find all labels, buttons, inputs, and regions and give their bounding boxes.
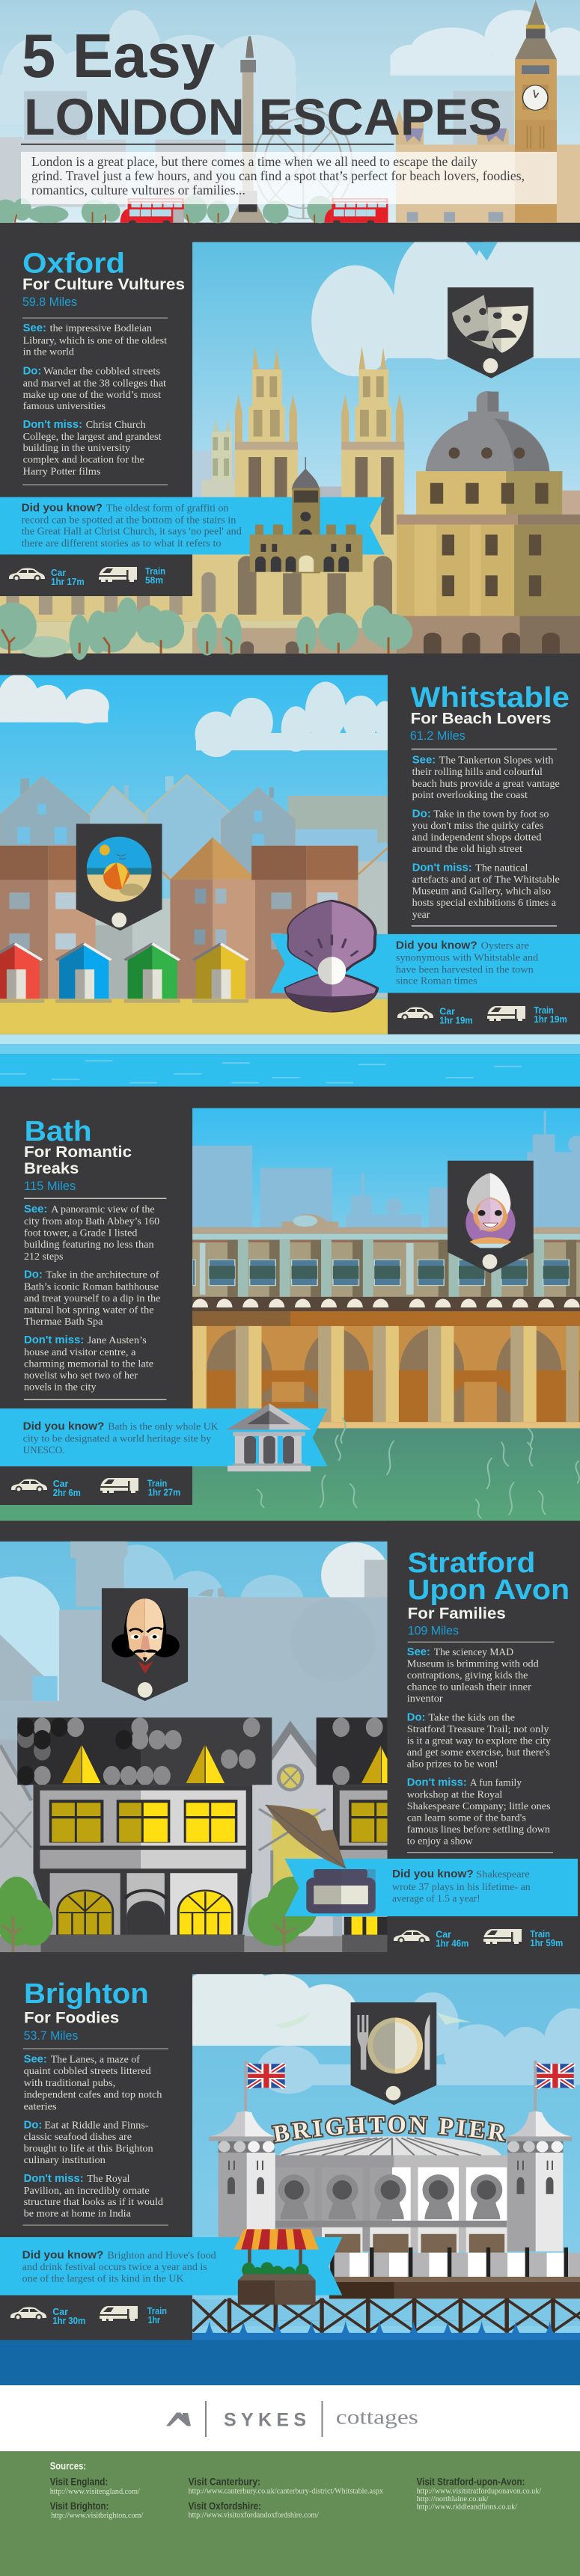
Oxford see / do / don't miss: Wander the cobbled streets xyxy=(43,366,160,377)
icon: Christ Church Tom Tower xyxy=(250,457,362,573)
Stratford see / do / don't miss: A fun family xyxy=(470,1778,522,1789)
Brighton see / do / don't miss: Pavilion, an incredibly ornate xyxy=(24,2186,150,2197)
icon: Sykes house mark xyxy=(166,2413,191,2426)
icon: quill and inkpot xyxy=(266,1805,376,1913)
Oxford did you know ribbon: the Great Hall at Christ Church, it says 'no peel' and xyxy=(22,527,242,538)
pier structure xyxy=(209,2061,572,2254)
Oxford see / do / don't miss: famous universities xyxy=(23,401,106,412)
sources column 3: http://northlaine.co.uk/ xyxy=(417,2495,489,2503)
Stratford did you know ribbon: average of 1.5 a year! xyxy=(392,1893,480,1904)
travel times: Stratford: 1hr 59m xyxy=(530,1937,563,1948)
Brighton did you know ribbon xyxy=(0,2237,342,2296)
Whitstable see / do / don't miss: See: xyxy=(412,753,436,766)
Stratford heading xyxy=(408,1548,570,1637)
sources column 3 xyxy=(417,2477,541,2512)
Whitstable see / do / don't miss: hosts special exhibitions 6 times a xyxy=(412,898,557,909)
Oxford heading: For Culture Vultures xyxy=(22,276,185,293)
travel times: Whitstable: Train xyxy=(534,1005,554,1016)
Stratford see / do / don't miss: workshop at the Royal xyxy=(407,1790,502,1801)
travel times: Whitstable: Car xyxy=(439,1005,455,1017)
Stratford heading: For Families xyxy=(408,1605,506,1622)
intro text: romantics, culture vultures or families... xyxy=(31,183,245,197)
Bath did you know ribbon: Bath is the only whole UK xyxy=(108,1421,219,1432)
Brighton heading: 53.7 Miles xyxy=(24,2028,78,2043)
Bath text panel xyxy=(0,1108,192,1505)
travel times: Whitstable: 1hr 19m xyxy=(534,1013,567,1025)
sources column 3: Visit Stratford-upon-Avon: xyxy=(417,2477,525,2488)
Bath did you know ribbon: Did you know? xyxy=(23,1420,104,1432)
sources column 2 xyxy=(189,2477,384,2520)
Brighton illustration xyxy=(0,1966,580,2420)
Whitstable see / do / don't miss xyxy=(412,753,560,921)
travel times: Oxford: 1hr 17m xyxy=(51,576,85,587)
Whitstable heading: Whitstable xyxy=(411,682,570,714)
Stratford see / do / don't miss: and get some exercise, but there's xyxy=(407,1747,550,1758)
Radcliffe Camera xyxy=(397,391,580,654)
icon: market stall xyxy=(233,2229,319,2304)
Stratford see / do / don't miss: to enjoy a show xyxy=(407,1836,474,1847)
icon: theatre masks badge xyxy=(448,287,534,378)
travel times: Brighton: Car xyxy=(52,2306,68,2317)
Bath did you know ribbon xyxy=(0,1408,328,1466)
intro text: London is a great place, but there comes a time when we all need to escape the daily xyxy=(31,154,477,169)
panel: Brighton xyxy=(0,1974,580,2385)
sources column 2: Visit Oxfordshire: xyxy=(189,2500,261,2512)
Bath see / do / don't miss: building featuring no less than xyxy=(24,1239,154,1251)
Whitstable see / do / don't miss: Don't miss: xyxy=(412,862,472,874)
panel: sources xyxy=(0,2451,580,2576)
Whitstable heading: For Beach Lovers xyxy=(411,711,551,727)
Whitstable did you know ribbon: synonymous with Whitstable and xyxy=(396,953,538,964)
Bath heading xyxy=(24,1116,132,1193)
Brighton did you know ribbon: Did you know? xyxy=(22,2248,103,2261)
Stratford see / do / don't miss: Take the kids on the xyxy=(428,1712,515,1723)
travel times: Brighton: 1hr 30m xyxy=(52,2315,85,2326)
Whitstable see / do / don't miss: their rolling hills and colourful xyxy=(412,767,543,778)
Oxford see / do / don't miss: and marvel at the 38 colleges that xyxy=(23,378,166,389)
Oxford see / do / don't miss: See: xyxy=(23,322,46,334)
travel times: Stratford xyxy=(394,1928,563,1949)
Bath did you know ribbon: UNESCO. xyxy=(23,1445,65,1456)
travel times: Oxford: 58m xyxy=(145,574,163,586)
Stratford see / do / don't miss: contraptions, giving kids the xyxy=(407,1670,528,1681)
title xyxy=(22,21,502,146)
Bath heading: Breaks xyxy=(24,1160,79,1177)
Oxford did you know ribbon xyxy=(0,497,385,554)
Bath heading: For Romantic xyxy=(24,1144,132,1161)
Stratford see / do / don't miss: Shakespeare Company; little ones xyxy=(407,1801,551,1812)
sea xyxy=(0,1034,580,1044)
sources column 1 xyxy=(50,2477,143,2520)
Stratford see / do / don't miss: chance to unleash their inner xyxy=(407,1682,531,1693)
Brighton see / do / don't miss: with traditional pubs, xyxy=(24,2078,115,2089)
Brighton see / do / don't miss: See: xyxy=(24,2052,47,2066)
sources column 1: http://www.visitengland.com/ xyxy=(50,2488,140,2496)
Union flags xyxy=(248,2064,574,2088)
Oxford see / do / don't miss: in the world xyxy=(23,346,74,358)
intro text xyxy=(31,154,525,197)
panel: header xyxy=(0,0,580,225)
Bath see / do / don't miss: foot tower, a Grade I listed xyxy=(24,1227,137,1239)
Stratford heading: Stratford xyxy=(408,1548,535,1579)
Oxford see / do / don't miss xyxy=(23,322,167,477)
Bath see / do / don't miss: city from atop Bath Abbey’s 160 xyxy=(24,1216,159,1227)
travel times: Brighton xyxy=(10,2305,167,2326)
Stratford see / do / don't miss: is it a great way to explore the city xyxy=(407,1735,551,1747)
travel times: Stratford: Car xyxy=(436,1928,451,1940)
Brighton see / do / don't miss: classic seafood dishes are xyxy=(24,2132,132,2143)
Stratford did you know ribbon: Did you know? xyxy=(392,1868,474,1880)
Brighton heading: Brighton xyxy=(24,1978,149,2010)
Tudor building xyxy=(0,1717,343,1952)
Oxford did you know ribbon: Did you know? xyxy=(22,501,103,515)
travel times: Bath: 1hr 27m xyxy=(148,1487,180,1497)
Oxford see / do / don't miss: building in the university xyxy=(23,443,130,454)
Oxford see / do / don't miss: the impressive Bodleian xyxy=(50,323,152,334)
beach huts xyxy=(0,944,248,1003)
icon: Shakespeare badge xyxy=(102,1588,188,1701)
Stratford heading: Upon Avon xyxy=(408,1574,570,1606)
Whitstable see / do / don't miss: point overlooking the coast xyxy=(412,790,528,801)
Stratford see / do / don't miss: Do: xyxy=(407,1711,425,1723)
icon: spa woman badge xyxy=(448,1161,534,1273)
Whitstable see / do / don't miss: you don't miss the quirky cafes xyxy=(412,821,543,832)
turrets xyxy=(219,2153,247,2237)
Brighton did you know ribbon: and drink festival occurs twice a year and is xyxy=(22,2262,207,2273)
Bath heading: 115 Miles xyxy=(24,1179,76,1193)
travel times: Bath: Train xyxy=(147,1478,167,1488)
Oxford did you know ribbon: record can be spotted at the bottom of the stairs in xyxy=(22,515,236,526)
Bath see / do / don't miss: Take in the architecture of xyxy=(46,1270,159,1281)
Brighton text panel xyxy=(0,1974,192,2340)
sources column 2: Visit Canterbury: xyxy=(189,2477,260,2488)
Oxford did you know ribbon: The oldest form of graffiti on xyxy=(106,503,229,515)
Brighton see / do / don't miss: culinary institution xyxy=(24,2155,106,2166)
Whitstable see / do / don't miss: The nautical xyxy=(475,863,528,874)
Whitstable see / do / don't miss: Take in the town by foot so xyxy=(433,809,549,820)
Bath see / do / don't miss: charming memorial to the late xyxy=(24,1359,153,1370)
travel times: Stratford: Train xyxy=(530,1928,550,1939)
sources column 3: http://www.riddleandfinns.co.uk/ xyxy=(417,2503,517,2512)
travel times: Stratford: 1hr 46m xyxy=(436,1937,468,1949)
panel: Whitstable xyxy=(0,674,580,1081)
Stratford see / do / don't miss: also prizes to be won! xyxy=(407,1759,498,1770)
sources column 3: http://www.visitstratforduponavon.co.uk/ xyxy=(417,2487,541,2495)
Oxford see / do / don't miss: Do: xyxy=(23,364,41,377)
steam xyxy=(257,1417,579,1519)
Whitstable did you know ribbon: Did you know? xyxy=(396,939,477,952)
Whitstable see / do / don't miss: around the old high street xyxy=(412,844,522,855)
sources column 2: http://www.visitoxfordandoxfordshire.com/ xyxy=(189,2512,319,2520)
sources column 1: Visit Brighton: xyxy=(50,2500,109,2512)
Bath see / do / don't miss: novelist who set two of her xyxy=(24,1370,138,1381)
Oxford see / do / don't miss: make up one of the world’s most xyxy=(23,390,161,401)
Stratford see / do / don't miss xyxy=(407,1646,551,1847)
Stratford see / do / don't miss: Don't miss: xyxy=(407,1776,467,1789)
Stratford heading: 109 Miles xyxy=(408,1623,459,1637)
Stratford text panel xyxy=(388,1521,580,1952)
sources column 1: Visit England: xyxy=(50,2477,108,2488)
travel times: Whitstable xyxy=(397,1005,567,1026)
icon: plate and cutlery badge xyxy=(351,2002,436,2105)
Stratford see / do / don't miss: The sciencey MAD xyxy=(434,1647,513,1658)
sources column 1: http://www.visitbrighton.com/ xyxy=(51,2512,143,2520)
Brighton heading: For Foodies xyxy=(24,2010,119,2027)
panel: Bath xyxy=(0,1077,580,1521)
fence and deck xyxy=(329,2248,580,2299)
Stratford did you know ribbon: wrote 37 plays in his lifetime- an xyxy=(392,1882,531,1893)
Oxford did you know ribbon: there are different stories as to what it refers to xyxy=(22,539,222,550)
travel times: Brighton: 1hr xyxy=(148,2314,160,2325)
travel times: Whitstable: 1hr 19m xyxy=(439,1014,473,1026)
travel times: Brighton: Train xyxy=(147,2305,167,2316)
trees xyxy=(0,598,412,660)
title: 5 Easy xyxy=(22,21,215,91)
Whitstable see / do / don't miss: artefacts and art of The Whitstable xyxy=(412,874,560,886)
Oxford illustration xyxy=(0,217,580,660)
Oxford see / do / don't miss: Christ Church xyxy=(86,420,146,431)
Bath see / do / don't miss xyxy=(24,1203,160,1393)
Brighton see / do / don't miss: quaint cobbled streets littered xyxy=(24,2066,151,2077)
Whitstable illustration xyxy=(0,674,580,1081)
travel times: Oxford xyxy=(9,565,165,587)
Whitstable see / do / don't miss: and independent shops dotted xyxy=(412,832,542,844)
travel times: Bath: 2hr 6m xyxy=(53,1487,81,1498)
Brighton see / do / don't miss: Do: xyxy=(24,2118,42,2131)
Bath see / do / don't miss: Do: xyxy=(24,1269,43,1281)
Brighton see / do / don't miss: The Royal xyxy=(87,2174,130,2185)
Stratford see / do / don't miss: Museum is brimming with odd xyxy=(407,1659,539,1670)
Brighton see / do / don't miss: structure that looks as if it would xyxy=(24,2197,163,2208)
logo wordmark: SYKES xyxy=(224,2409,306,2430)
intro text: grind. Travel just a few hours, and you can find a spot that’s perfect for beach lovers, foodies, xyxy=(31,168,525,183)
intro backing panel xyxy=(21,152,557,204)
travel times: Bath: Car xyxy=(53,1478,68,1489)
Bath see / do / don't miss: Don't miss: xyxy=(24,1334,84,1346)
panel: Stratford Upon Avon xyxy=(0,1518,580,1952)
Whitstable text panel xyxy=(388,675,580,1029)
Whitstable did you know ribbon: Oysters are xyxy=(481,941,529,952)
Oxford heading xyxy=(22,248,185,309)
Bath see / do / don't miss: and treat yourself to a dip in the xyxy=(24,1293,160,1304)
Oxford heading: 59.8 Miles xyxy=(22,295,77,309)
icon: oyster and pearl xyxy=(286,901,377,1011)
Brighton did you know ribbon: one of the largest of its kind in the UK xyxy=(22,2274,184,2285)
Oxford see / do / don't miss: Library, which is one of the oldest xyxy=(23,335,167,346)
Stratford did you know ribbon: Shakespeare xyxy=(476,1869,530,1880)
Bath see / do / don't miss: Thermae Bath Spa xyxy=(24,1316,103,1328)
Bath heading: Bath xyxy=(25,1116,92,1147)
travel times: Oxford: Car xyxy=(51,567,66,578)
Whitstable see / do / don't miss: beach huts provide a great vantage xyxy=(412,779,560,790)
header illustration: London skyline xyxy=(0,0,580,225)
sources heading: Sources: xyxy=(50,2461,86,2472)
Whitstable did you know ribbon: have been harvested in the town xyxy=(396,964,534,975)
Whitstable see / do / don't miss: Do: xyxy=(412,808,431,820)
panel: Sykes Cottages logo xyxy=(0,2385,580,2451)
Oxford see / do / don't miss: Harry Potter films xyxy=(23,466,100,477)
Whitstable did you know ribbon: since Roman times xyxy=(396,976,477,987)
Whitstable heading xyxy=(410,682,570,743)
title: LONDON ESCAPES xyxy=(24,88,502,146)
Bath see / do / don't miss: novels in the city xyxy=(24,1382,96,1393)
travel times: Bath xyxy=(11,1478,180,1498)
Oxford see / do / don't miss: College, the largest and grandest xyxy=(23,432,162,443)
Bath illustration xyxy=(0,1077,580,1521)
Bath see / do / don't miss: Bath’s iconic Roman bathhouse xyxy=(24,1282,159,1293)
Brighton see / do / don't miss xyxy=(24,2052,163,2220)
Stratford illustration xyxy=(0,1518,580,1952)
Brighton did you know ribbon: Brighton and Hove's food xyxy=(107,2250,216,2261)
Stratford see / do / don't miss: can learn some of the bard's xyxy=(407,1813,526,1824)
Oxford heading: Oxford xyxy=(22,248,125,280)
Brighton see / do / don't miss: The Lanes, a maze of xyxy=(51,2054,140,2066)
Stratford see / do / don't miss: inventor xyxy=(407,1693,443,1705)
Stratford did you know ribbon xyxy=(285,1859,578,1916)
Stratford see / do / don't miss: famous lines before settling down xyxy=(407,1824,550,1836)
logo wordmark: cottages xyxy=(336,2406,418,2429)
Stratford see / do / don't miss: See: xyxy=(407,1646,430,1658)
Brighton see / do / don't miss: be more at home in India xyxy=(24,2209,132,2220)
Whitstable see / do / don't miss: Museum and Gallery, which also xyxy=(412,886,551,898)
Bath see / do / don't miss: natural hot spring water of the xyxy=(24,1305,154,1316)
Brighton see / do / don't miss: brought to life at this Brighton xyxy=(24,2143,153,2154)
logo wordmark xyxy=(224,2406,418,2430)
green trees xyxy=(0,1877,318,1945)
Whitstable see / do / don't miss: The Tankerton Slopes with xyxy=(439,755,554,766)
Whitstable heading: 61.2 Miles xyxy=(410,729,465,743)
Brighton see / do / don't miss: Don't miss: xyxy=(24,2172,84,2185)
Brighton Pier sign: BRIGHTON PIER xyxy=(271,2115,506,2144)
panel: Oxford xyxy=(0,217,580,660)
title underline xyxy=(21,144,394,145)
Bath see / do / don't miss: See: xyxy=(24,1203,47,1215)
Whitstable see / do / don't miss: year xyxy=(412,910,430,921)
Stratford see / do / don't miss: Stratford Treasure Trail; not only xyxy=(407,1724,549,1735)
Whitstable did you know ribbon xyxy=(270,934,580,993)
Oxford text panel xyxy=(0,223,192,596)
icon: beach umbrella badge xyxy=(76,824,162,930)
Brighton see / do / don't miss: independent cafes and top notch xyxy=(24,2090,162,2101)
Oxford see / do / don't miss: complex and location for the xyxy=(23,455,144,466)
icon: Roman temple xyxy=(227,1403,311,1471)
Brighton heading xyxy=(24,1978,149,2043)
Brighton see / do / don't miss: Eat at Riddle and Finns- xyxy=(44,2120,149,2131)
Oxford see / do / don't miss: Don't miss: xyxy=(23,418,82,431)
second Tudor building xyxy=(317,1717,388,1952)
travel times: Oxford: Train xyxy=(145,565,165,577)
Bath see / do / don't miss: 212 steps xyxy=(24,1251,63,1263)
Brighton see / do / don't miss: eateries xyxy=(24,2101,57,2112)
neighbouring timber houses xyxy=(0,1727,333,1952)
Bath see / do / don't miss: A panoramic view of the xyxy=(51,1204,155,1215)
Bath did you know ribbon: city to be designated a world heritage site by xyxy=(23,1433,211,1445)
sources column 2: http://www.canterbury.co.uk/canterbury-district/Whitstable.aspx xyxy=(189,2487,384,2495)
Bath see / do / don't miss: house and visitor centre, a xyxy=(24,1347,136,1358)
Bath see / do / don't miss: Jane Austen’s xyxy=(88,1335,147,1346)
